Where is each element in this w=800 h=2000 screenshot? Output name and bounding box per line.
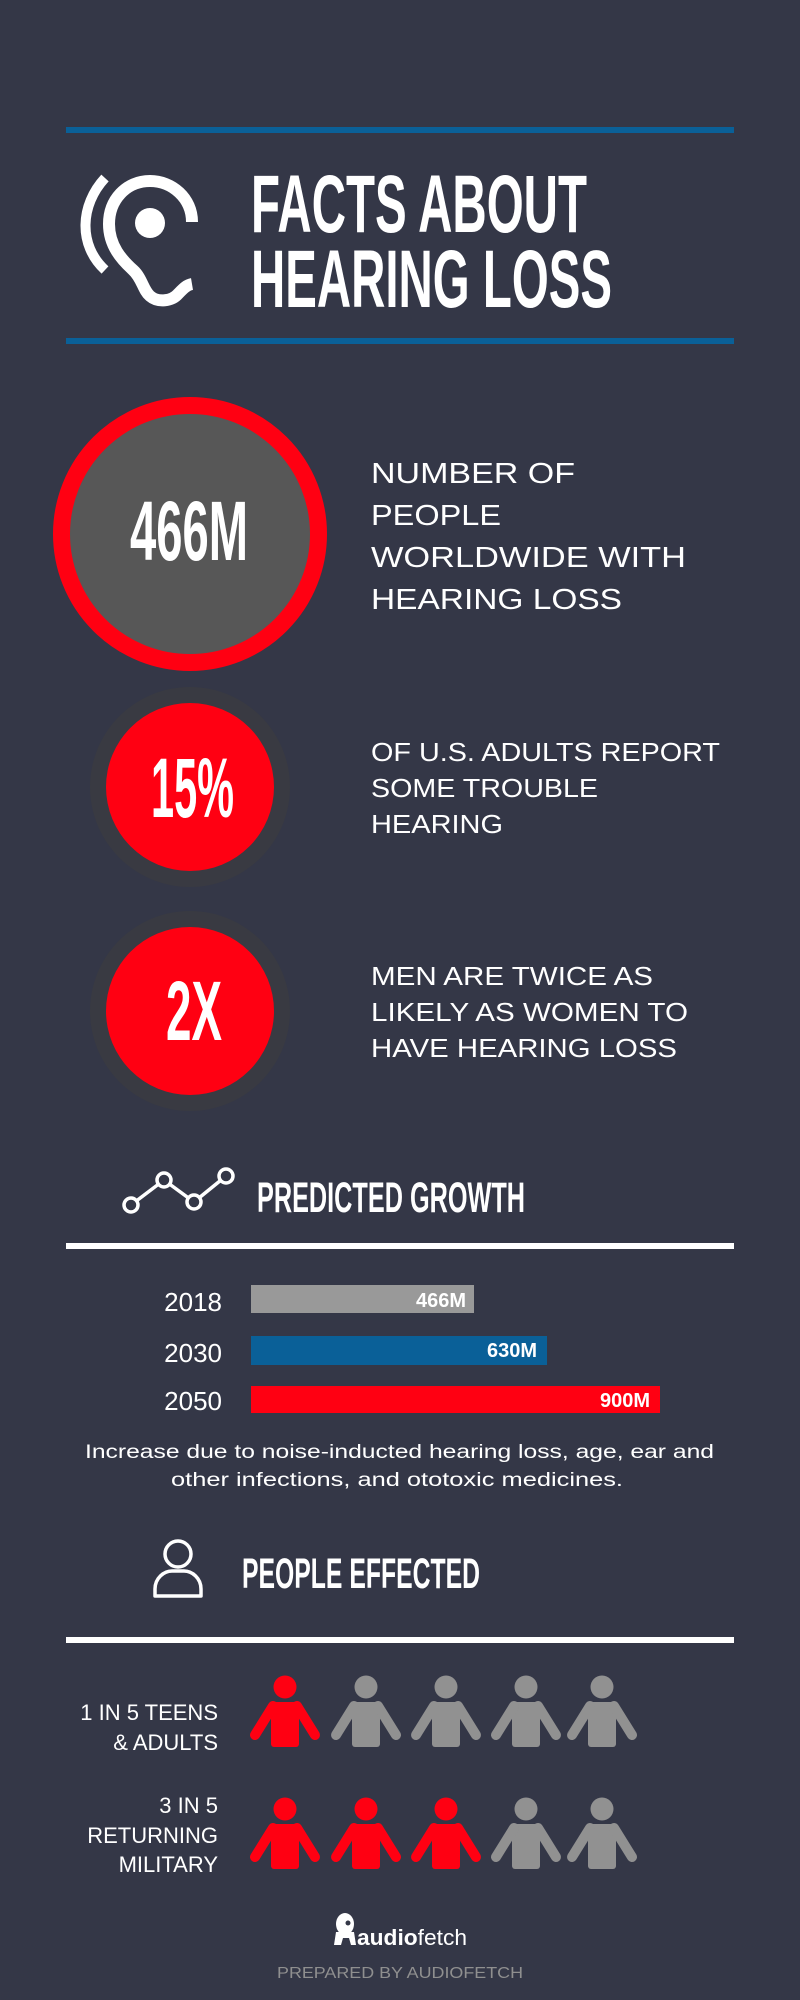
bar chart: predicted growth: 2030 bbox=[164, 1338, 222, 1368]
icon: growth line bbox=[124, 1169, 233, 1212]
text: number of people worldwide: WORLDWIDE WITH bbox=[371, 542, 686, 574]
stat circle: 15%: 15% bbox=[151, 741, 234, 835]
text: number of people worldwide: HEARING LOSS bbox=[371, 584, 622, 616]
heading: people effected: PEOPLE EFFECTED bbox=[242, 1550, 480, 1598]
bar chart: predicted growth bbox=[164, 1285, 660, 1416]
logo: audiofetch bbox=[334, 1913, 467, 1950]
text: men twice: HAVE HEARING LOSS bbox=[371, 1033, 677, 1063]
bar chart: predicted growth: 2018 bbox=[164, 1287, 222, 1317]
text: US adults bbox=[371, 737, 720, 839]
label: 3 in 5 military: RETURNING bbox=[87, 1823, 218, 1848]
title bbox=[251, 159, 612, 325]
note text: other infections, and ototoxic medicines. bbox=[171, 1470, 623, 1491]
label: 3 in 5 military: MILITARY bbox=[119, 1852, 218, 1877]
stat circle: 466M: 466M bbox=[130, 484, 248, 578]
footer: prepared by: PREPARED BY AUDIOFETCH bbox=[277, 1965, 523, 1982]
label: 3 in 5 military bbox=[87, 1793, 218, 1877]
label: 1 in 5 teens bbox=[80, 1700, 218, 1755]
bar chart: predicted growth: 466M bbox=[416, 1290, 466, 1312]
text: number of people worldwide: PEOPLE bbox=[371, 500, 501, 532]
text: men twice: MEN ARE TWICE AS bbox=[371, 961, 653, 991]
stat circle: 2X bbox=[90, 911, 290, 1111]
label: 3 in 5 military: 3 IN 5 bbox=[159, 1793, 218, 1818]
pictogram row 2 bbox=[255, 1798, 632, 1869]
text: number of people worldwide bbox=[371, 458, 686, 616]
text: US adults: SOME TROUBLE bbox=[371, 773, 598, 803]
text: men twice bbox=[371, 961, 688, 1063]
note text: Increase due to noise-inducted hearing loss, age, ear and bbox=[85, 1442, 714, 1463]
label: 1 in 5 teens: & ADULTS bbox=[113, 1730, 218, 1755]
note text bbox=[85, 1442, 714, 1491]
stat circle: 466M bbox=[62, 406, 318, 662]
text: number of people worldwide: NUMBER OF bbox=[371, 458, 575, 490]
logo: audiofetch: audiofetch bbox=[357, 1925, 467, 1950]
label: 1 in 5 teens: 1 IN 5 TEENS bbox=[80, 1700, 218, 1725]
text: US adults: OF U.S. ADULTS REPORT bbox=[371, 737, 720, 767]
pictogram row 1 bbox=[255, 1676, 632, 1747]
text: US adults: HEARING bbox=[371, 809, 503, 839]
text: men twice: LIKELY AS WOMEN TO bbox=[371, 997, 688, 1027]
bar chart: predicted growth: 2050 bbox=[164, 1386, 222, 1416]
bar chart: predicted growth: 630M bbox=[487, 1340, 537, 1362]
stat circle: 2X: 2X bbox=[166, 964, 222, 1058]
stat circle: 15% bbox=[90, 687, 290, 887]
icon: ear bbox=[85, 178, 192, 300]
icon: person outline bbox=[155, 1541, 201, 1596]
bar chart: predicted growth: 900M bbox=[600, 1390, 650, 1412]
heading: predicted growth: PREDICTED GROWTH bbox=[257, 1174, 525, 1222]
